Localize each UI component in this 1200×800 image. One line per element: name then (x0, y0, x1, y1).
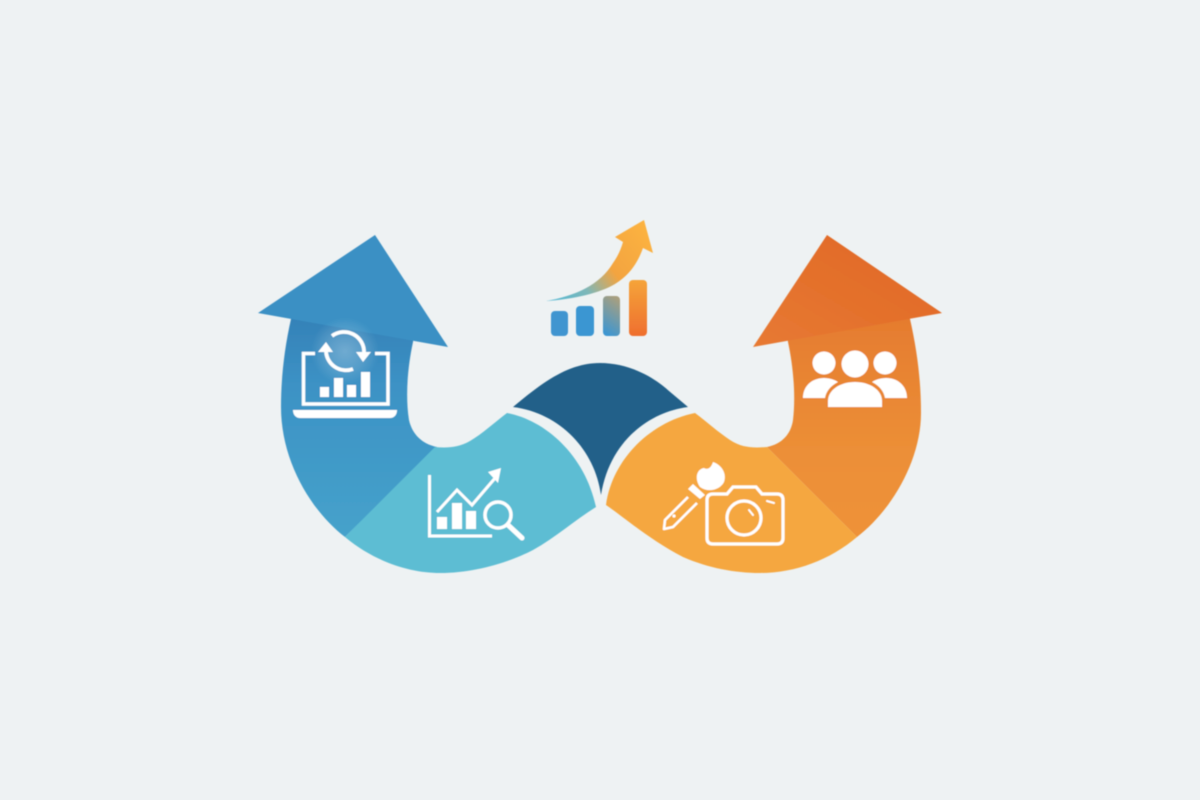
rising arrow (546, 220, 653, 301)
icon: chart with magnifier (430, 468, 522, 538)
icon: paintbrush and camera (664, 462, 783, 544)
left arrow: teal lower segment (345, 413, 596, 573)
icon: growth chart with rising arrow (546, 220, 653, 336)
right arrow: orange lower segment (606, 413, 857, 573)
arrow head: orange (753, 235, 942, 347)
right arrow: dark orange upper segment (753, 235, 942, 537)
icon: group of people (803, 350, 907, 407)
left arrow: blue upper segment (258, 235, 448, 537)
icon: laptop with sync and bars (293, 317, 397, 418)
arrow head: blue (258, 235, 448, 347)
center navy segment (513, 363, 688, 495)
